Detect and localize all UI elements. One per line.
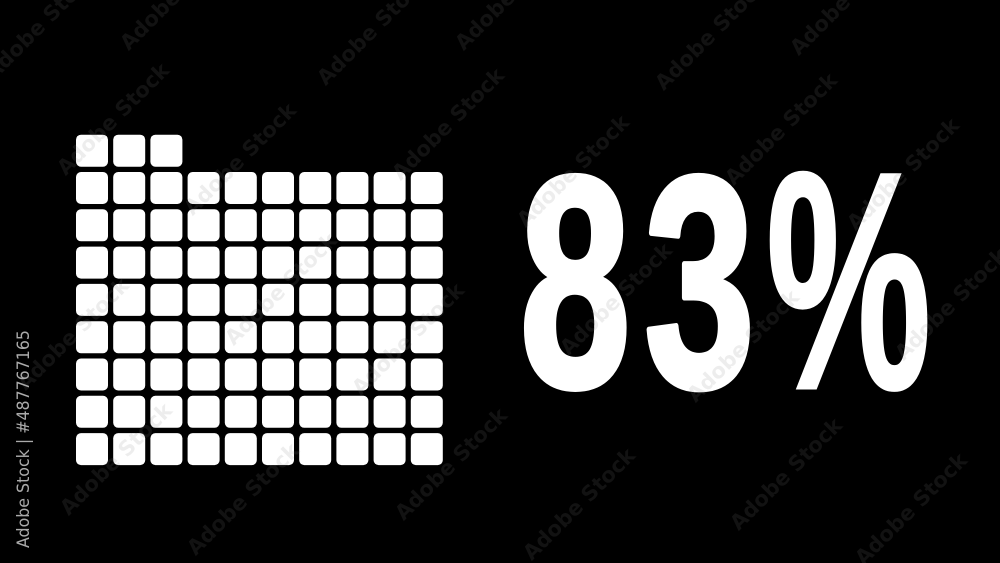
stock watermarks: Adobe Stock: [179, 97, 302, 220]
digit 8: 8: [520, 115, 631, 451]
stock watermarks: Adobe Stock: [52, 57, 175, 180]
stock watermarks: Adobe Stock: [842, 112, 965, 235]
stock watermarks: Adobe Stock: [182, 437, 305, 560]
digit 3: 3: [644, 115, 755, 451]
stock watermarks: Adobe Stock: [518, 442, 641, 563]
stock watermarks: Adobe Stock: [387, 62, 510, 185]
stock id label: Adobe Stock | #487767165: [14, 330, 34, 548]
stock watermarks: Adobe Stock: [55, 397, 178, 520]
stock watermarks: Adobe Stock: [720, 67, 843, 190]
stock watermarks: Adobe Stock: [512, 109, 635, 232]
stock watermarks: Adobe Stock: [725, 412, 848, 535]
stock watermarks: Adobe Stock: [682, 284, 805, 407]
stock watermarks: Adobe Stock: [12, 272, 135, 395]
stock watermarks: Adobe Stock: [220, 227, 343, 350]
stock watermarks: Adobe Stock: [390, 402, 513, 525]
waffle chart: 83 of 100 squares: [76, 135, 443, 465]
stock watermarks: Adobe Stock: [555, 237, 678, 360]
stock watermarks: Adobe Stock: [347, 277, 470, 400]
percentage value: 83%: [520, 109, 931, 455]
percent sign: %: [766, 109, 931, 455]
